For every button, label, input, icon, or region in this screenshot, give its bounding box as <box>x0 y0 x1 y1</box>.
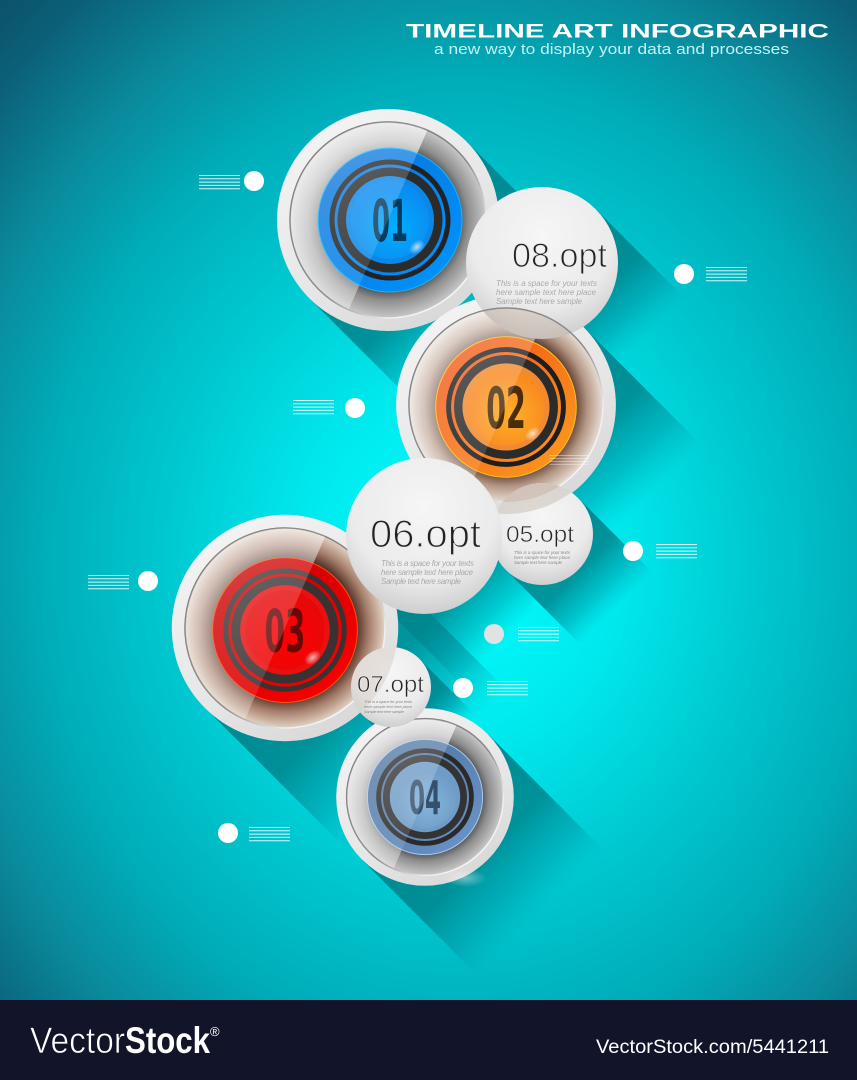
glass overlap from button 02 <box>498 483 571 514</box>
footer logo: ® <box>210 1024 220 1039</box>
timeline button 01 (blue): 01 <box>372 187 408 255</box>
marker 02: dot and text lines <box>293 398 365 418</box>
marker 08: dot and text lines <box>674 264 747 284</box>
footer logo: Stock <box>125 1020 210 1061</box>
08 body text <box>496 279 597 306</box>
title: TIMELINE ART INFOGRAPHIC <box>406 22 829 42</box>
long shadows <box>205 142 700 977</box>
05 heading: 05.opt <box>506 521 575 547</box>
option bubble 05 <box>498 483 593 585</box>
06 body text <box>381 559 474 586</box>
06 body text: here sample text here place <box>381 568 474 577</box>
glass overlap from button 03 <box>351 647 396 712</box>
timeline button 01 (blue) <box>277 109 498 331</box>
07 body text <box>364 699 413 714</box>
07 body text: Sample text here sample <box>364 709 405 714</box>
05 body text: Sample text here sample <box>514 560 562 565</box>
08 body text: Sample text here sample <box>496 297 583 306</box>
06 heading: 06.opt <box>370 513 481 556</box>
07 body text: This is a space for your texts <box>364 699 412 704</box>
05 body text: here sample text here place <box>514 555 570 560</box>
05 body text: This is a space for your texts <box>514 550 571 555</box>
option bubble 07 <box>351 648 431 727</box>
footer logo: Vector <box>30 1020 125 1061</box>
08 body text: here sample text here place <box>496 288 597 297</box>
subtitle: a new way to display your data and processes <box>434 41 789 58</box>
marker 06: dot and text lines <box>484 624 559 644</box>
glow on button 04 rim <box>443 869 487 887</box>
footer logo <box>30 1020 220 1061</box>
marker 04: dot and text lines <box>218 823 290 843</box>
05 body text <box>514 550 571 565</box>
07 heading: 07.opt <box>357 671 425 697</box>
timeline button 02 (orange) <box>396 300 616 510</box>
option bubble 08 <box>466 187 618 339</box>
06 body text: This is a space for your texts <box>381 559 474 568</box>
glass overlap from button 02 <box>482 307 572 339</box>
timeline button 02 (orange): 02 <box>486 375 526 442</box>
marker 05: dot and text lines <box>623 541 697 561</box>
option bubble 06 <box>346 458 502 614</box>
timeline button 04 (steel blue) <box>336 708 514 886</box>
timeline button 03 (red): 03 <box>265 596 305 665</box>
08 heading: 08.opt <box>512 237 608 275</box>
timeline button 04 (steel blue): 04 <box>409 771 441 825</box>
footer bar <box>0 1000 857 1080</box>
timeline button 03 (red) <box>172 514 398 742</box>
marker 03: dot and text lines <box>88 571 158 591</box>
07 body text: here sample text here place <box>364 704 413 709</box>
footer image id: VectorStock.com/5441211 <box>596 1037 829 1058</box>
marker 07: dot and text lines <box>453 678 528 698</box>
title block <box>406 22 829 58</box>
08 body text: This is a space for your texts <box>496 279 597 288</box>
faint text lines on button 02 <box>550 455 589 464</box>
06 body text: Sample text here sample <box>381 577 462 586</box>
marker 01: dot and text lines <box>199 171 264 191</box>
